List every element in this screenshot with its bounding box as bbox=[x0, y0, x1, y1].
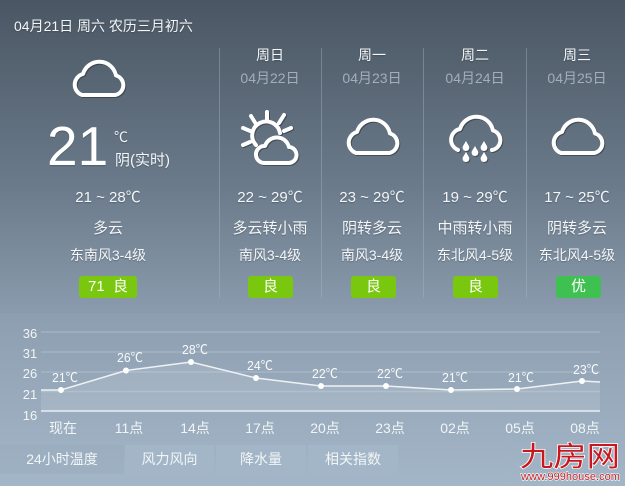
forecast Wednesday: 04月25日 bbox=[547, 70, 607, 86]
forecast Wednesday: 优 bbox=[571, 278, 586, 295]
temperature labels: 24℃ bbox=[247, 358, 273, 373]
temperature labels: 21℃ bbox=[508, 370, 534, 385]
forecast Monday bbox=[339, 47, 405, 298]
temperature labels: 23℃ bbox=[573, 362, 599, 377]
icon: cloud Wednesday bbox=[554, 120, 602, 153]
forecast Sunday: 22 ~ 29℃ bbox=[237, 189, 303, 206]
today forecast: 东南风3-4级 bbox=[70, 247, 146, 263]
forecast Monday: 周一 bbox=[358, 47, 386, 63]
x axis labels: 05点 bbox=[505, 420, 535, 436]
temperature labels: 21℃ bbox=[442, 370, 468, 385]
icon: sun behind cloud bbox=[243, 112, 297, 163]
forecast Monday: 04月23日 bbox=[342, 70, 402, 86]
current temperature: 21 bbox=[47, 115, 108, 177]
x axis labels: 08点 bbox=[570, 420, 600, 436]
forecast Monday: 南风3-4级 bbox=[341, 247, 403, 263]
temperature labels: 22℃ bbox=[312, 366, 338, 381]
temperature labels: 28℃ bbox=[182, 342, 208, 357]
forecast Monday: 良 bbox=[366, 278, 381, 295]
tab: wind: 风力风向 bbox=[142, 451, 198, 467]
forecast Tuesday: 中雨转小雨 bbox=[437, 220, 512, 237]
x axis labels: 02点 bbox=[440, 420, 470, 436]
today forecast bbox=[70, 189, 146, 263]
forecast Tuesday bbox=[437, 47, 513, 298]
forecast Wednesday: 阴转多云 bbox=[547, 220, 607, 237]
forecast Monday: 23 ~ 29℃ bbox=[339, 189, 405, 206]
tab: indices bbox=[308, 445, 398, 474]
icon: cloud Monday bbox=[349, 120, 397, 153]
tab: precipitation: 降水量 bbox=[240, 451, 282, 467]
tab: 24 hour temperature bbox=[0, 445, 124, 474]
temperature labels: 22℃ bbox=[377, 366, 403, 381]
today forecast: 21 ~ 28℃ bbox=[75, 189, 141, 206]
current condition: 阴(实时) bbox=[115, 152, 170, 169]
forecast Sunday bbox=[232, 47, 308, 298]
temperature labels: 21℃ bbox=[52, 370, 78, 385]
tab: precipitation bbox=[216, 445, 306, 474]
watermark logo: 九房网 bbox=[520, 441, 620, 472]
forecast Wednesday: 17 ~ 25℃ bbox=[544, 189, 610, 206]
forecast Wednesday bbox=[539, 47, 615, 298]
icon: rain cloud bbox=[451, 117, 500, 162]
forecast Monday: 阴转多云 bbox=[342, 220, 402, 237]
forecast Wednesday: 周三 bbox=[563, 47, 591, 63]
forecast Tuesday: 19 ~ 29℃ bbox=[442, 189, 508, 206]
x axis labels bbox=[49, 420, 600, 436]
y axis labels: 31 bbox=[23, 346, 37, 361]
forecast Tuesday: 04月24日 bbox=[445, 70, 505, 86]
today forecast: 多云 bbox=[93, 220, 123, 237]
tab: 24 hour temperature: 24小时温度 bbox=[26, 451, 98, 467]
forecast Sunday: 良 bbox=[263, 278, 278, 295]
watermark logo: www.999house.com bbox=[520, 471, 620, 483]
y axis labels bbox=[23, 326, 37, 423]
tab: indices: 相关指数 bbox=[325, 451, 381, 467]
y axis labels: 21 bbox=[23, 387, 37, 402]
forecast Sunday: 周日 bbox=[256, 47, 284, 63]
top panel background bbox=[0, 0, 625, 313]
x axis labels: 17点 bbox=[245, 420, 275, 436]
air quality today bbox=[79, 276, 137, 298]
forecast Wednesday: 东北风4-5级 bbox=[539, 247, 615, 263]
y axis labels: 16 bbox=[23, 408, 37, 423]
x axis labels: 14点 bbox=[180, 420, 210, 436]
forecast Sunday: 04月22日 bbox=[240, 70, 300, 86]
forecast Tuesday: 东北风4-5级 bbox=[437, 247, 513, 263]
forecast Tuesday: 良 bbox=[468, 278, 483, 295]
y axis labels: 26 bbox=[23, 366, 37, 381]
icon: cloud today bbox=[75, 62, 123, 95]
air quality today: 71 良 bbox=[88, 278, 128, 295]
tab: wind bbox=[125, 445, 214, 474]
x axis labels: 20点 bbox=[310, 420, 340, 436]
x axis labels: 23点 bbox=[375, 420, 405, 436]
x axis labels: 现在 bbox=[49, 420, 77, 436]
forecast Tuesday: 周二 bbox=[461, 47, 489, 63]
date heading: 04月21日 周六 农历三月初六 bbox=[14, 18, 193, 34]
forecast Sunday: 南风3-4级 bbox=[239, 247, 301, 263]
temperature labels bbox=[52, 342, 599, 385]
unit: ℃ bbox=[114, 129, 128, 145]
line series bbox=[41, 359, 600, 393]
y axis labels: 36 bbox=[23, 326, 37, 341]
lower panel background bbox=[0, 313, 625, 486]
forecast Sunday: 多云转小雨 bbox=[232, 220, 308, 237]
temperature labels: 26℃ bbox=[117, 350, 143, 365]
x axis labels: 11点 bbox=[115, 420, 143, 436]
